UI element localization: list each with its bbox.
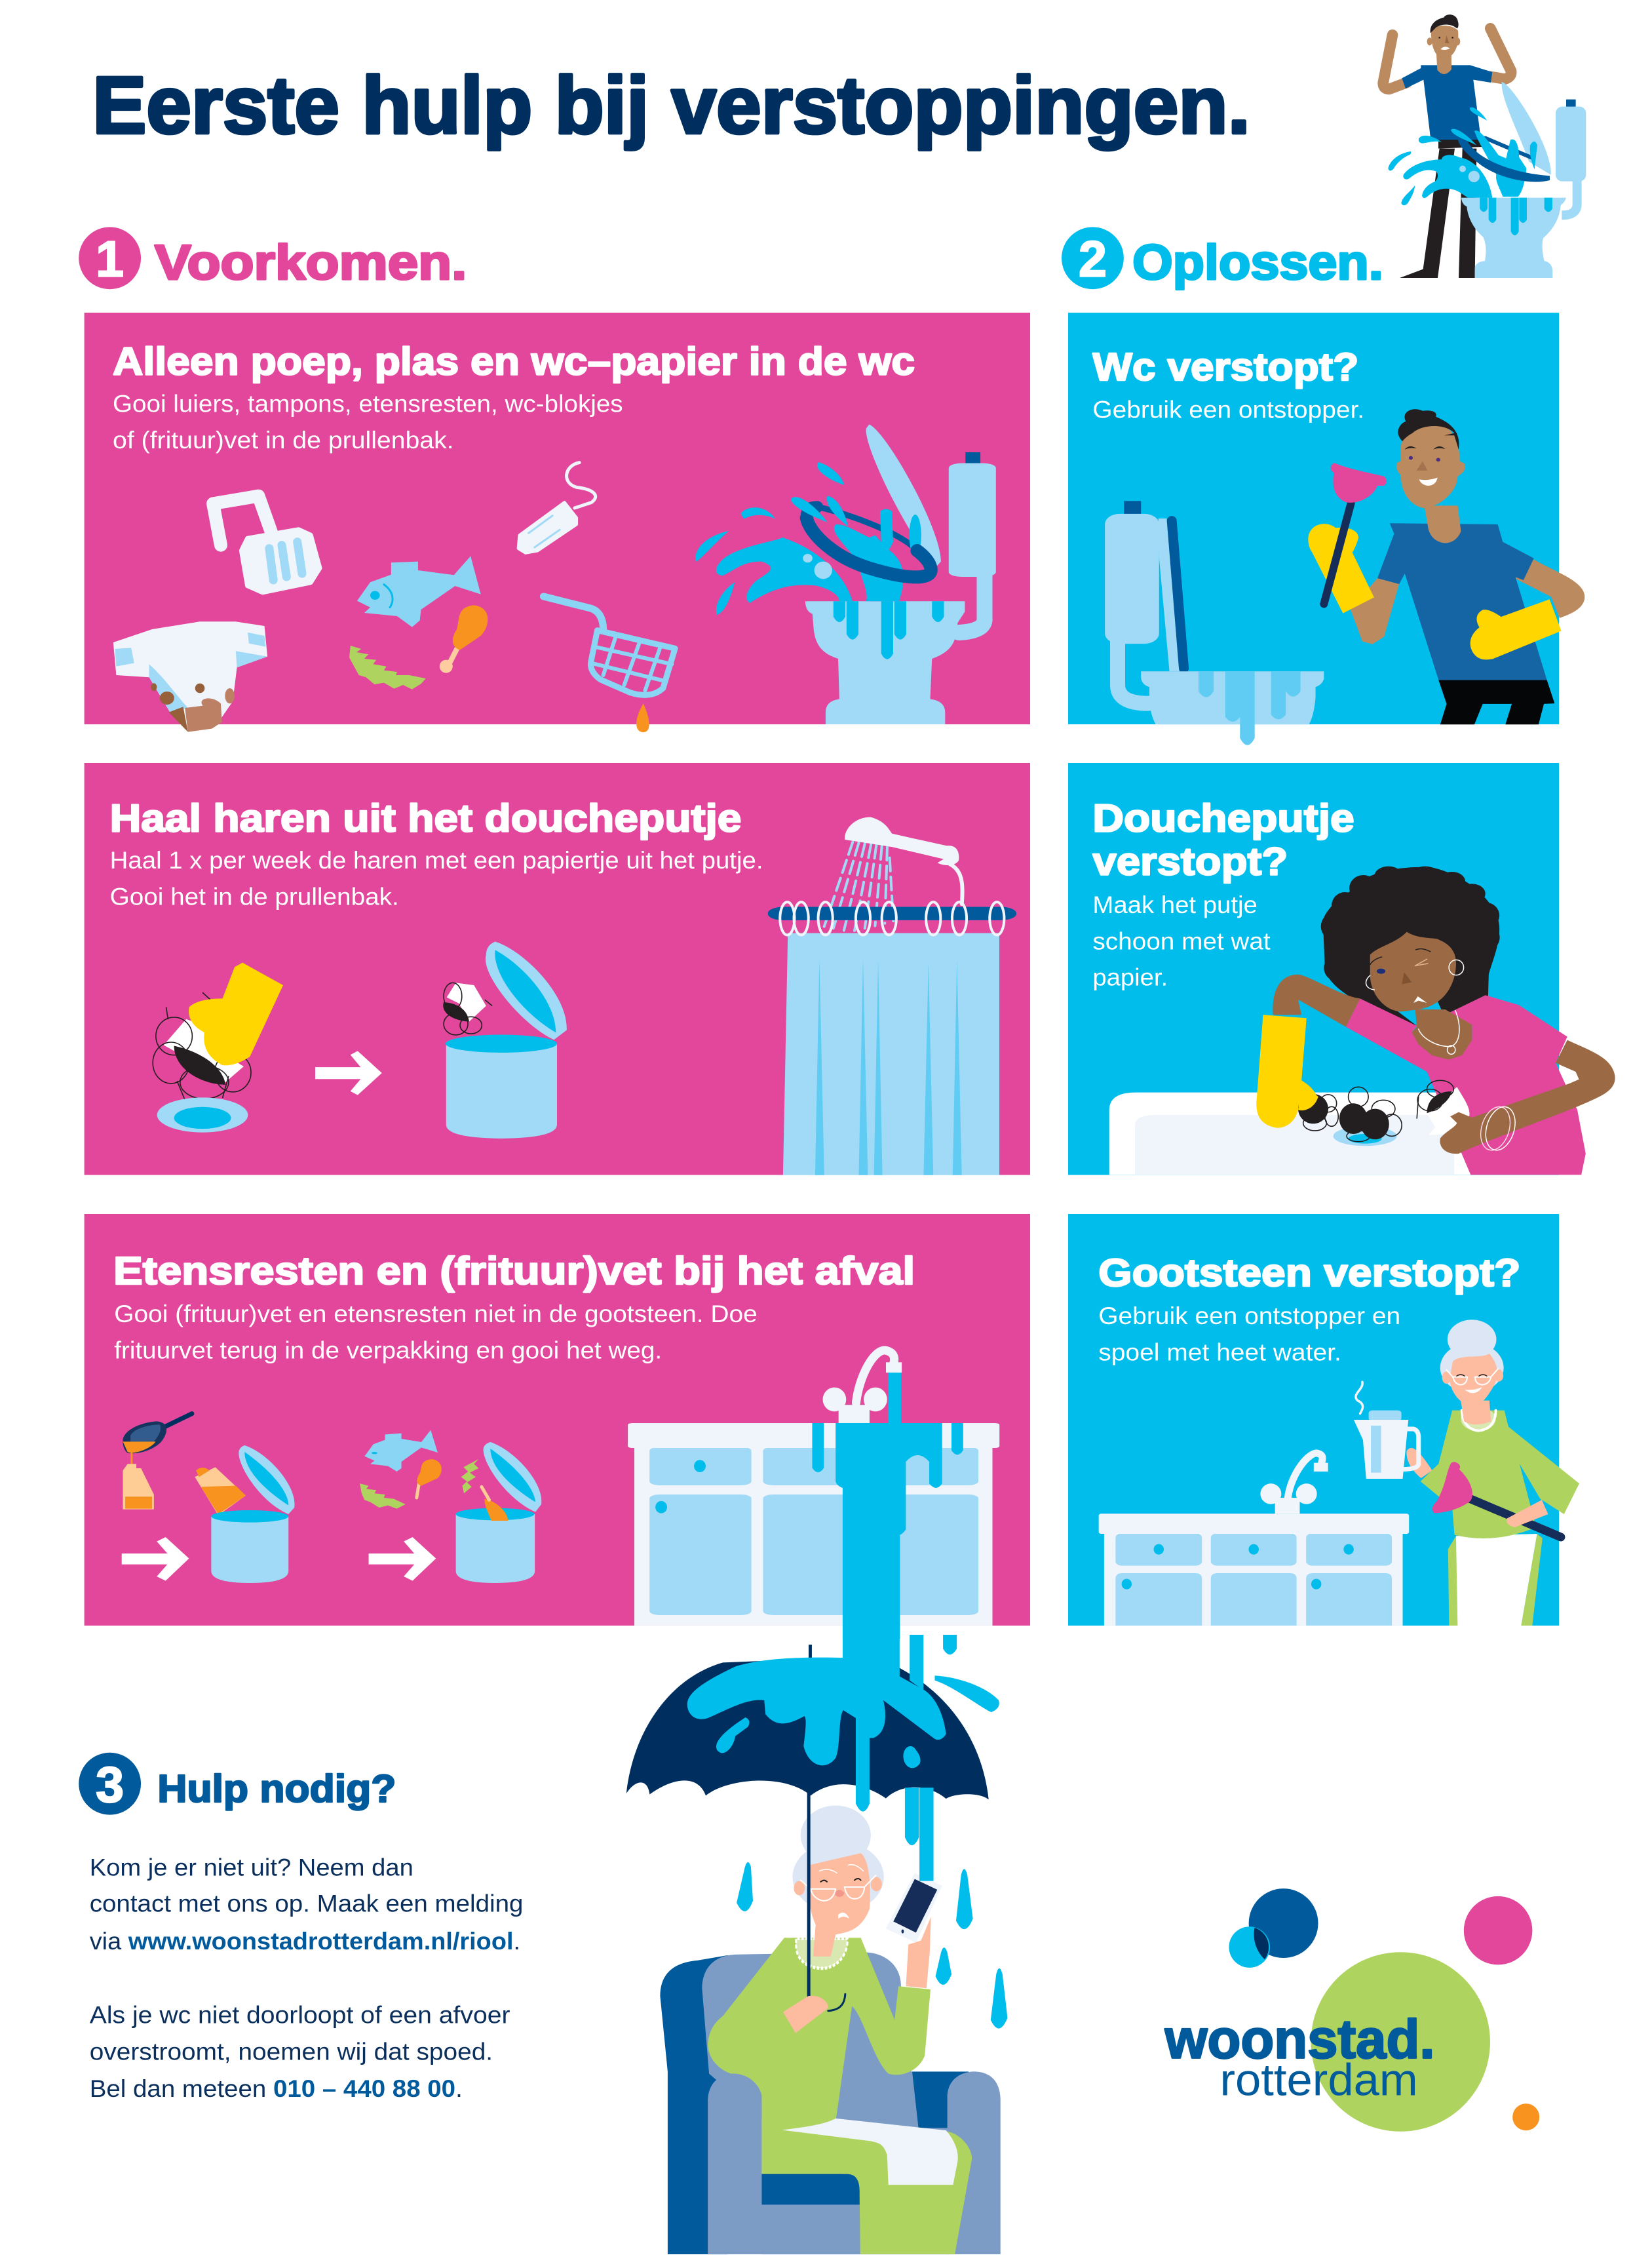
body text: Gooi luiers, tampons, etensresten, wc-blokjes bbox=[113, 390, 623, 418]
contact text: Kom je er niet uit? Neem dan bbox=[90, 1853, 413, 1881]
panel: wc verstopt bbox=[1068, 313, 1585, 745]
section: 3 hulp nodig bbox=[79, 1753, 523, 2102]
section heading: 2 Oplossen bbox=[1062, 227, 1383, 290]
section: 3 hulp nodig: Bel dan meteen 010 – 440 88 00 . bbox=[90, 2075, 463, 2102]
heading: Haal haren uit het doucheputje bbox=[110, 796, 741, 840]
urgent text: Als je wc niet doorloopt of een afvoer bbox=[90, 2001, 510, 2028]
section: 3 hulp nodig: via www.woonstadrotterdam.nl/riool . bbox=[90, 1927, 520, 1955]
illustration: hair removal, bin and shower curtain bbox=[153, 817, 1016, 1175]
panel: doucheputje verstopt: papier. bbox=[1092, 964, 1168, 991]
logo: woonstad rotterdam: rotterdam bbox=[1220, 2056, 1418, 2105]
section: 3 hulp nodig: overstroomt, noemen wij dat spoed. bbox=[90, 2038, 493, 2065]
heading: Doucheputje bbox=[1092, 796, 1354, 840]
section heading: 2 Oplossen: Oplossen. bbox=[1132, 235, 1383, 290]
body text: Haal 1 x per week de haren met een papiertje uit het putje. bbox=[110, 846, 763, 874]
panel: etensresten en frituurvet bbox=[85, 1214, 1030, 1639]
panel: doucheputje verstopt: schoon met wat bbox=[1092, 927, 1271, 954]
section heading: 1 Voorkomen: Voorkomen. bbox=[155, 235, 467, 290]
panel: alleen poep, plas en wc-papier bbox=[85, 313, 1030, 732]
body text: Gebruik een ontstopper. bbox=[1092, 396, 1364, 423]
illustration: toilet and smiling man with plunger bbox=[1105, 409, 1585, 745]
logo: woonstad rotterdam: woonstad. bbox=[1164, 2008, 1434, 2069]
panel: gootsteen verstopt bbox=[1068, 1214, 1579, 1626]
panel: gootsteen verstopt: spoel met heet water. bbox=[1098, 1338, 1341, 1365]
heading: Alleen poep, plas en wc–papier in de wc bbox=[113, 339, 915, 383]
section: 3 hulp nodig: contact met ons op. Maak een melding bbox=[90, 1889, 523, 1917]
panel: etensresten en frituurvet: frituurvet terug in de verpakking en gooi het weg. bbox=[114, 1337, 662, 1364]
illustration: woman cleaning shower drain bbox=[1109, 867, 1615, 1175]
illustration: wc items and overflowing toilet bbox=[113, 424, 996, 732]
illustration: panicking man at overflowing toilet bbox=[1383, 14, 1586, 278]
heading: Gootsteen verstopt? bbox=[1098, 1251, 1520, 1295]
body text: Gebruik een ontstopper en bbox=[1098, 1302, 1400, 1329]
logo: woonstad rotterdam bbox=[1164, 1888, 1539, 2132]
panel: doucheputje verstopt bbox=[1068, 763, 1615, 1175]
section heading: 1 Voorkomen bbox=[79, 227, 467, 290]
body text: Gooi (frituur)vet en etensresten niet in de gootsteen. Doe bbox=[114, 1300, 758, 1327]
illustration: woman in armchair under umbrella with water from above bbox=[626, 1635, 1007, 2254]
section: 3 hulp nodig: 3 bbox=[96, 1757, 124, 1813]
section heading: 1 Voorkomen: 1 bbox=[96, 231, 124, 287]
illustration: pouring fat, food waste, bins and kitchen sink bbox=[122, 1350, 999, 1639]
panel: alleen poep, plas en wc-papier: of (frituur)vet in de prullenbak. bbox=[113, 426, 454, 454]
section heading: 2 Oplossen: 2 bbox=[1079, 231, 1107, 287]
panel: doucheputje verstopt: verstopt? bbox=[1092, 840, 1288, 884]
body text: Maak het putje bbox=[1092, 891, 1258, 918]
heading: Hulp nodig? bbox=[157, 1767, 396, 1810]
heading: Wc verstopt? bbox=[1092, 345, 1358, 389]
panel: haal haren uit het doucheputje bbox=[85, 763, 1030, 1175]
title: Eerste hulp bij verstoppingen. bbox=[92, 60, 1250, 151]
illustration: sink and grandmother with kettle and plunger bbox=[1099, 1319, 1579, 1626]
heading: Etensresten en (frituur)vet bij het afval bbox=[113, 1249, 915, 1293]
panel: haal haren uit het doucheputje: Gooi het in de prullenbak. bbox=[110, 882, 399, 910]
